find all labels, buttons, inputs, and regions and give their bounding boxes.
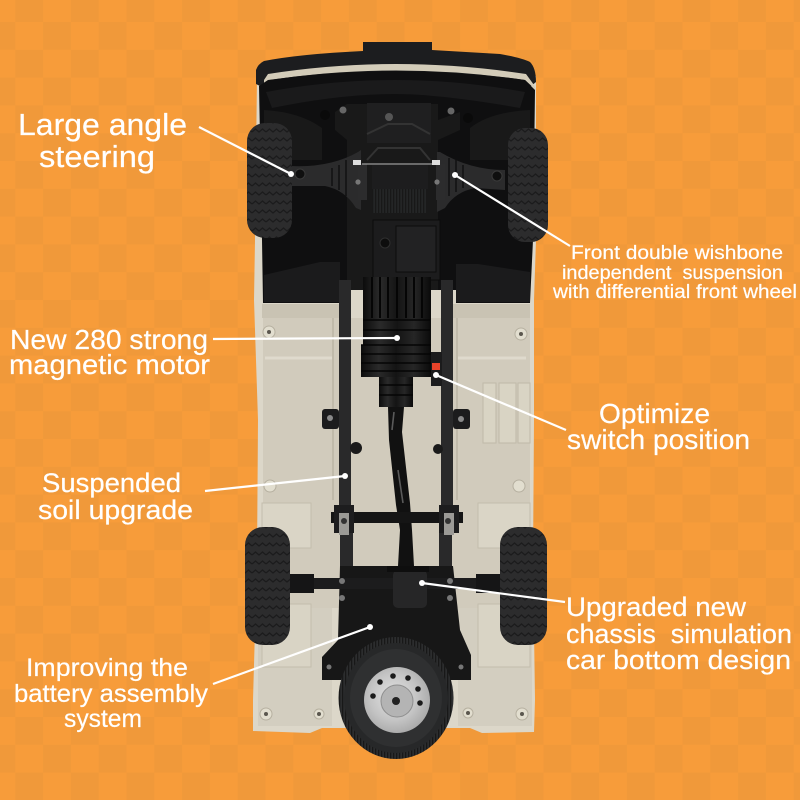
label: upgraded chassis: chassis simulation [566, 619, 792, 649]
car chassis photo [245, 42, 548, 759]
label: motor: magnetic motor [9, 349, 210, 380]
label: battery assembly [14, 654, 209, 733]
label: front double wishbone [552, 243, 797, 303]
tyres [245, 123, 548, 645]
black front bumper and engine bay [256, 42, 536, 303]
arrow: wishbone [452, 172, 570, 246]
spare wheel [338, 637, 454, 759]
label: switch position [567, 398, 750, 455]
callout lines [199, 127, 570, 684]
arrow: steering [199, 127, 294, 177]
arrow: switch [433, 372, 566, 430]
screw holes [264, 330, 524, 716]
label: suspended soil upgrade: Suspended [42, 468, 181, 498]
arrow: battery [213, 624, 373, 684]
rear axle and battery plate [288, 566, 502, 680]
label: suspended soil upgrade: soil upgrade [38, 495, 193, 525]
label: upgraded chassis: Upgraded new [566, 592, 747, 622]
front wishbone arms [290, 150, 505, 212]
label: front double wishbone: with differential front wheel [552, 282, 797, 303]
tray rib panel [483, 383, 530, 443]
label: large angle steering [18, 107, 187, 174]
cream body tray [253, 76, 536, 733]
label: motor [9, 324, 210, 380]
arrow: chassis [419, 580, 565, 602]
label: suspended soil upgrade [38, 468, 193, 525]
label: battery assembly: system [64, 705, 142, 733]
label: switch position: switch position [567, 424, 750, 455]
label: upgraded chassis: car bottom design [566, 645, 791, 675]
label: large angle steering: Large angle [18, 107, 187, 142]
label: front double wishbone: independent suspension [562, 263, 783, 284]
label: front double wishbone: Front double wishbone [571, 243, 783, 264]
arrow: motor [213, 335, 400, 341]
frame rails [322, 280, 470, 620]
label: upgraded chassis [566, 592, 792, 675]
rear cross member [331, 505, 463, 535]
label: large angle steering: steering [39, 139, 155, 174]
motor and drive shaft [361, 277, 442, 566]
arrow: suspended [205, 473, 348, 491]
label: battery assembly: battery assembly [14, 680, 209, 708]
label: switch position: Optimize [599, 398, 710, 429]
label: motor: New 280 strong [10, 324, 208, 355]
screw posts [260, 326, 528, 720]
label: battery assembly: Improving the [26, 654, 188, 682]
